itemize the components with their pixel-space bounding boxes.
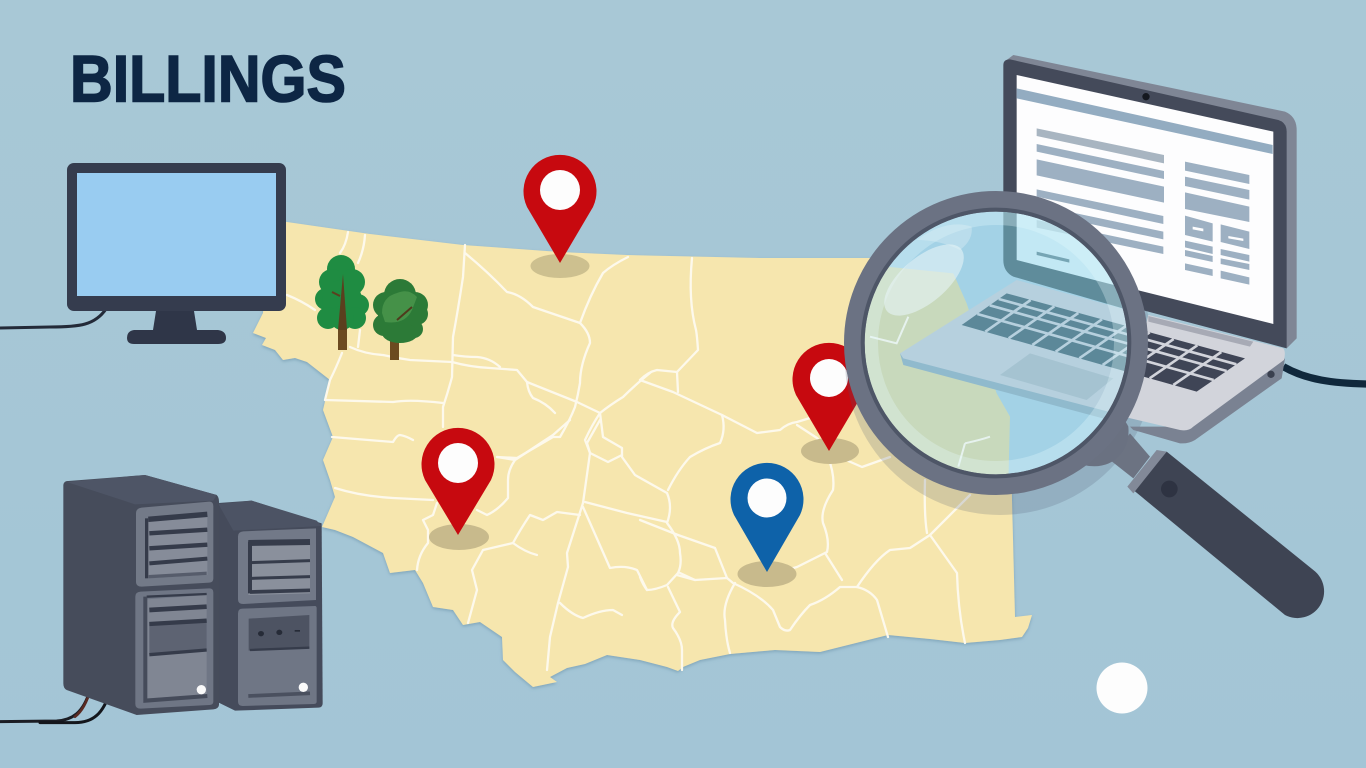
lens screen lines [1036,220,1070,234]
magnifier handle [1110,433,1324,618]
lens laptop deck [900,280,1128,418]
tree right [373,279,428,360]
laptop lid [1003,55,1297,348]
left tower [63,475,219,715]
icon: laptop [962,55,1366,443]
lens small bar [1037,252,1069,263]
lens screen [1016,213,1114,285]
roads [287,232,970,670]
icon: magnifying glass [853,183,1324,618]
magnifier shadow [845,205,1155,515]
pin: north red [524,155,596,278]
land shape [253,220,1032,687]
icon: desktop monitor [0,163,286,344]
monitor screen [77,173,276,296]
lens glare [884,244,964,316]
pin: west red [422,428,494,550]
laptop screen content [1017,88,1273,285]
white dot [1096,662,1148,714]
lens water [889,212,1122,474]
icon: trees [315,255,428,360]
server cables [0,685,112,723]
pin: east red [792,343,866,464]
lens lid [1003,212,1122,308]
title: BILLINGS [70,42,346,116]
lens rim highlight [871,218,1121,468]
icon: server towers [0,475,323,723]
lens [864,212,1128,474]
magnifier collar [1083,418,1129,466]
lens road reflections [870,317,990,467]
laptop cable [1283,367,1366,384]
monitor cable [0,309,106,328]
lens land [864,267,1010,474]
monitor body [67,163,286,311]
right tower [213,501,323,711]
tree left [315,255,369,350]
laptop base [962,293,1285,443]
magnifier inner edge [863,210,1129,476]
map of region [253,220,1032,687]
lens upper glare [917,224,972,250]
magnifier ring [854,201,1138,485]
monitor stand [127,311,226,344]
pin: south blue [730,463,804,587]
